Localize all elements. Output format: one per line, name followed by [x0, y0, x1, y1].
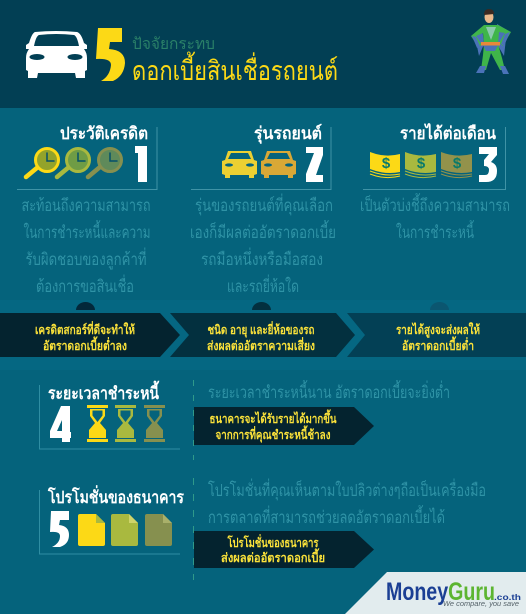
description: สะท้อนถึงความสามารถ: [22, 196, 150, 215]
description: [208, 478, 486, 527]
callout text: [221, 534, 325, 565]
logo tagline: We compare, you save: [443, 601, 519, 608]
heading: รุ่นรถยนต์: [254, 123, 322, 144]
banner text 2: [207, 321, 315, 353]
title: ดอกเบี้ยสินเชื่อรถยนต์: [132, 51, 338, 86]
subtitle: ปัจจัยกระทบ: [132, 36, 215, 53]
banner text 1: เครดิตสกอร์ที่ดีจะทำให้: [35, 321, 135, 337]
logo wordmark: MoneyGuru: [386, 578, 495, 606]
header band: [0, 0, 526, 108]
connector dots: [76, 302, 449, 310]
banner text 2: ชนิด อายุ และยี่ห้อของรถ: [208, 321, 314, 338]
callout text: ธนาคารจะได้รับรายได้มากขึ้น: [210, 409, 337, 426]
icon: three banknotes: $: [453, 155, 462, 172]
icon: three documents: [78, 514, 172, 546]
icon: three magnifiers with clocks: [26, 148, 122, 177]
logo block: [345, 572, 526, 614]
panel: repayment period: [40, 380, 450, 460]
icon: white car: [26, 31, 87, 78]
banner text 3: [396, 322, 480, 353]
panel: credit history: [17, 124, 157, 296]
heading: ระยะเวลาชำระหนี้: [48, 380, 159, 403]
heading: โปรโมชั่นของธนาคาร: [47, 485, 185, 507]
description: การตลาดที่สามารถช่วยลดอัตราดอกเบี้ยได้: [208, 505, 445, 527]
icon: three banknotes: $: [382, 155, 391, 172]
banner text 1: อัตราดอกเบี้ยต่ำลง: [43, 336, 127, 353]
number 4: [50, 406, 71, 442]
arrow banner 1: [0, 313, 180, 357]
panel frame: [191, 127, 331, 190]
description: ในการชำระหนี้: [396, 220, 474, 242]
panel frame: [40, 385, 180, 449]
description: และรถยี่ห้อใด: [227, 274, 299, 296]
heading: รายได้ต่อเดือน: [400, 123, 496, 143]
panel frame: [363, 127, 506, 190]
description: [190, 193, 336, 296]
dashed divider: [192, 478, 194, 580]
callout arrow: [194, 531, 374, 568]
icon: superhero mascot: [471, 9, 511, 74]
banner row: [0, 300, 526, 370]
description: [360, 193, 510, 242]
panel: monthly income: [360, 123, 510, 242]
logo domain: .co.th: [494, 593, 521, 602]
panel frame: [40, 490, 180, 554]
description: ในการชำระหนี้และความ: [24, 220, 150, 242]
banner text 1: [35, 321, 135, 353]
arrow banner 3: [347, 313, 526, 357]
number 3: [479, 147, 497, 182]
banner text 3: อัตราดอกเบี้ยต่ำ: [402, 336, 474, 353]
banner text 3: รายได้สูงจะส่งผลให้: [396, 322, 480, 338]
icon: two cars: [222, 151, 296, 178]
callout text: โปรโมชั่นของธนาคาร: [227, 534, 319, 550]
panel: bank promotions: [40, 478, 486, 580]
banner text 2: ส่งผลต่ออัตราความเสี่ยง: [207, 337, 315, 353]
dashed divider: [192, 380, 194, 460]
number 1: [135, 146, 147, 182]
icon: three hourglasses: [87, 405, 165, 442]
callout text: จากการที่คุณชำระหนี้ช้าลง: [216, 425, 330, 443]
description: รถมือหนึ่งหรือมือสอง: [201, 247, 323, 269]
description: รุ่นของรถยนต์ที่คุณเลือก: [195, 193, 333, 216]
panel frame: [17, 127, 157, 190]
arrow banner 2: [170, 313, 355, 357]
panel: car model: [190, 123, 336, 296]
number 2: [306, 147, 323, 182]
callout arrow: [194, 407, 374, 445]
description: ต้องการขอสินเชื่อ: [36, 274, 134, 296]
description: รับผิดชอบของลูกค้าที่: [26, 247, 146, 270]
number 5: [50, 511, 69, 547]
heading: ประวัติเครดิต: [60, 124, 148, 143]
callout text: [210, 409, 337, 443]
big number 5: [96, 28, 125, 81]
description: [22, 196, 150, 296]
callout text: ส่งผลต่ออัตราดอกเบี้ย: [221, 548, 325, 565]
description: เองก็มีผลต่ออัตราดอกเบี้ย: [190, 220, 336, 242]
icon: three banknotes: [370, 152, 472, 178]
icon: three banknotes: $: [417, 155, 426, 172]
